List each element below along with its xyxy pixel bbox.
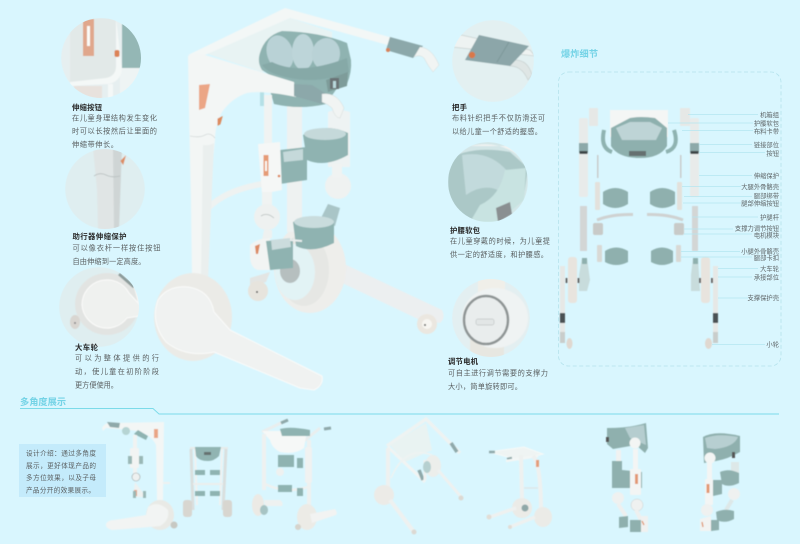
text: walker extension guard: 自由伸缩到一定高度。 bbox=[72, 257, 146, 266]
detail circle: adjustment motor bbox=[452, 278, 530, 358]
heading: telescopic button: 伸缩按钮 bbox=[72, 103, 103, 112]
exoskeleton strut back plate bbox=[328, 110, 350, 167]
heading: walker extension guard: 助行器伸缩保护 bbox=[72, 232, 126, 241]
exoskeleton lower bbox=[248, 204, 340, 301]
front handle bbox=[294, 84, 344, 118]
part labels: 支撑保护壳 bbox=[748, 293, 780, 302]
text: handle bbox=[452, 114, 545, 136]
rear frame leg bbox=[287, 85, 302, 232]
part labels: 承接部位 bbox=[754, 272, 780, 282]
text: waist pad bbox=[450, 236, 550, 259]
intro box: 展示，更好体现产品的 bbox=[26, 461, 96, 470]
top frame front and leg bbox=[188, 54, 296, 280]
text: telescopic button: 时可以长按然后让里面的 bbox=[72, 126, 157, 136]
view 7: exoskeleton back bbox=[700, 433, 740, 531]
exploded drawing bbox=[560, 108, 718, 349]
part labels: 大车轮 bbox=[760, 264, 780, 273]
text: telescopic button: 在儿童身理结构发生变化 bbox=[72, 114, 157, 122]
right wheel and arm bbox=[274, 223, 444, 334]
part labels: 伸缩保护 bbox=[754, 171, 779, 180]
detail circle: waist pad bbox=[448, 142, 530, 222]
part labels: 腿部绑带 bbox=[754, 191, 779, 200]
heading: large wheel: 大车轮 bbox=[75, 343, 99, 352]
section rule bbox=[20, 408, 779, 414]
detail circle: telescopic button bbox=[61, 18, 142, 100]
text: walker extension guard bbox=[72, 244, 160, 266]
part labels: 大腿外骨骼壳 bbox=[741, 182, 780, 191]
main product: walker with exoskeleton bbox=[154, 8, 444, 390]
part labels: 小轮 bbox=[766, 340, 780, 348]
heading: adjustment motor: 调节电机 bbox=[448, 357, 479, 366]
section heading: multi-angle views: 多角度展示 bbox=[20, 396, 66, 407]
heading: handle: 把手 bbox=[452, 103, 468, 112]
text: walker extension guard: 可以像衣杆一样按住按钮 bbox=[72, 244, 160, 252]
rear handle bbox=[386, 37, 439, 72]
heading: waist pad: 护腰软包 bbox=[450, 226, 481, 235]
text: telescopic button bbox=[72, 114, 157, 149]
text: large wheel: 可以为整体提供的行 bbox=[75, 354, 159, 362]
exoskeleton upper bbox=[258, 95, 351, 206]
text: adjustment motor: 可自主进行调节需要的支撑力 bbox=[448, 368, 548, 378]
text: adjustment motor bbox=[448, 368, 548, 391]
detail circle: large wheel bbox=[59, 267, 140, 347]
view 1: side bbox=[102, 422, 178, 530]
part labels: 按钮 bbox=[766, 148, 780, 158]
part labels bbox=[735, 110, 780, 348]
detail circle: handle bbox=[452, 20, 535, 102]
part labels: 小腿外骨骼壳 bbox=[741, 246, 780, 256]
part labels: 腿部伸缩按钮 bbox=[741, 198, 780, 208]
waist brace bbox=[259, 31, 351, 107]
leader lines bbox=[668, 114, 765, 344]
part labels: 电机模块 bbox=[754, 230, 780, 240]
exploded view panel bbox=[558, 72, 781, 366]
text: waist pad: 供一定的舒适度，和护腰感。 bbox=[450, 250, 548, 259]
text: telescopic button: 伸缩带伸长。 bbox=[72, 140, 118, 149]
top frame rear bbox=[188, 8, 393, 72]
text: large wheel bbox=[75, 354, 159, 390]
detail circle: walker extension guard bbox=[65, 148, 145, 230]
text: handle: 布料针织把手不仅防滑还可 bbox=[452, 114, 545, 122]
intro box: 多方位效果，以及子母 bbox=[26, 473, 96, 482]
part labels: 机箱组 bbox=[760, 110, 780, 119]
part labels: 护腿杆 bbox=[760, 212, 780, 222]
text: adjustment motor: 大小，简单旋转即可。 bbox=[448, 382, 522, 391]
section heading: exploded detail: 爆炸细节 bbox=[561, 48, 598, 59]
view 5: small walker only bbox=[486, 447, 552, 529]
text: handle: 以给儿童一个舒适的握感。 bbox=[452, 127, 542, 136]
part labels: 支撑力调节按钮 bbox=[735, 224, 780, 232]
intro box: 产品分开的效果展示。 bbox=[26, 486, 95, 494]
intro box bbox=[19, 444, 106, 497]
view 3: front three-quarter bbox=[252, 420, 337, 530]
view 2: rear bbox=[183, 447, 232, 517]
part labels: 布料卡带 bbox=[754, 126, 779, 136]
text: large wheel: 更方便使用。 bbox=[75, 380, 118, 390]
hoop bar bbox=[208, 184, 262, 208]
part labels: 护腰软包 bbox=[754, 118, 780, 128]
left wheel and arm bbox=[154, 273, 322, 390]
part labels: 链接部位 bbox=[754, 140, 780, 149]
view 6: exoskeleton front bbox=[606, 423, 648, 532]
text: large wheel: 动，使儿童在初阶阶段 bbox=[75, 367, 159, 376]
text: waist pad: 在儿童穿戴的时候，为儿童提 bbox=[450, 236, 550, 246]
part labels: 腿部卡扣 bbox=[754, 253, 779, 262]
intro box: 设计介绍：通过多角度 bbox=[26, 448, 96, 458]
view 4: top angle bbox=[374, 419, 464, 534]
